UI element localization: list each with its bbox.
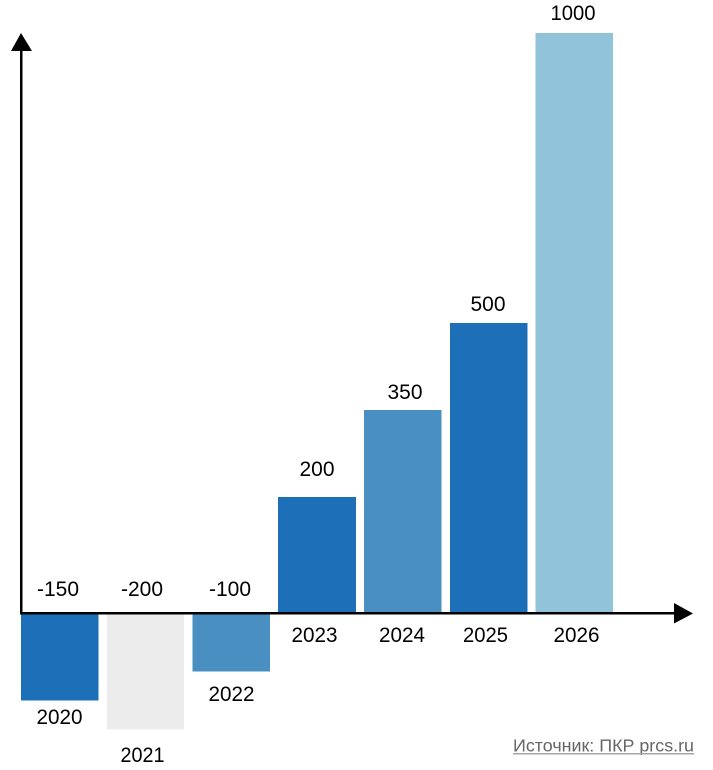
year labels (36, 624, 600, 767)
year 2022: 2022 (208, 683, 254, 706)
value 2020: -150 (37, 578, 79, 601)
bar 2024 (364, 410, 442, 613)
source note: Источник: ПКР prcs.ru (513, 736, 694, 756)
bar 2025 (450, 323, 528, 613)
year 2025: 2025 (463, 624, 508, 647)
year 2026: 2026 (554, 624, 600, 647)
axes (11, 33, 693, 624)
year 2024: 2024 (379, 624, 425, 647)
value 2026: 1000 (550, 2, 596, 25)
year 2023: 2023 (292, 624, 338, 647)
bar 2023 (278, 497, 356, 613)
horizontal axis arrow (20, 603, 693, 624)
year 2020: 2020 (36, 706, 82, 729)
vertical axis arrow (11, 33, 32, 614)
bar 2021 (107, 613, 184, 730)
bar 2026 (536, 33, 613, 613)
bars (21, 33, 613, 730)
year 2021: 2021 (120, 744, 164, 767)
bar 2020 (21, 613, 98, 700)
bar 2022 (192, 613, 270, 672)
value labels (37, 2, 596, 601)
value 2022: -100 (209, 578, 251, 601)
value 2025: 500 (470, 293, 506, 316)
value 2024: 350 (388, 381, 422, 404)
value 2021: -200 (121, 578, 163, 601)
value 2023: 200 (300, 458, 334, 481)
